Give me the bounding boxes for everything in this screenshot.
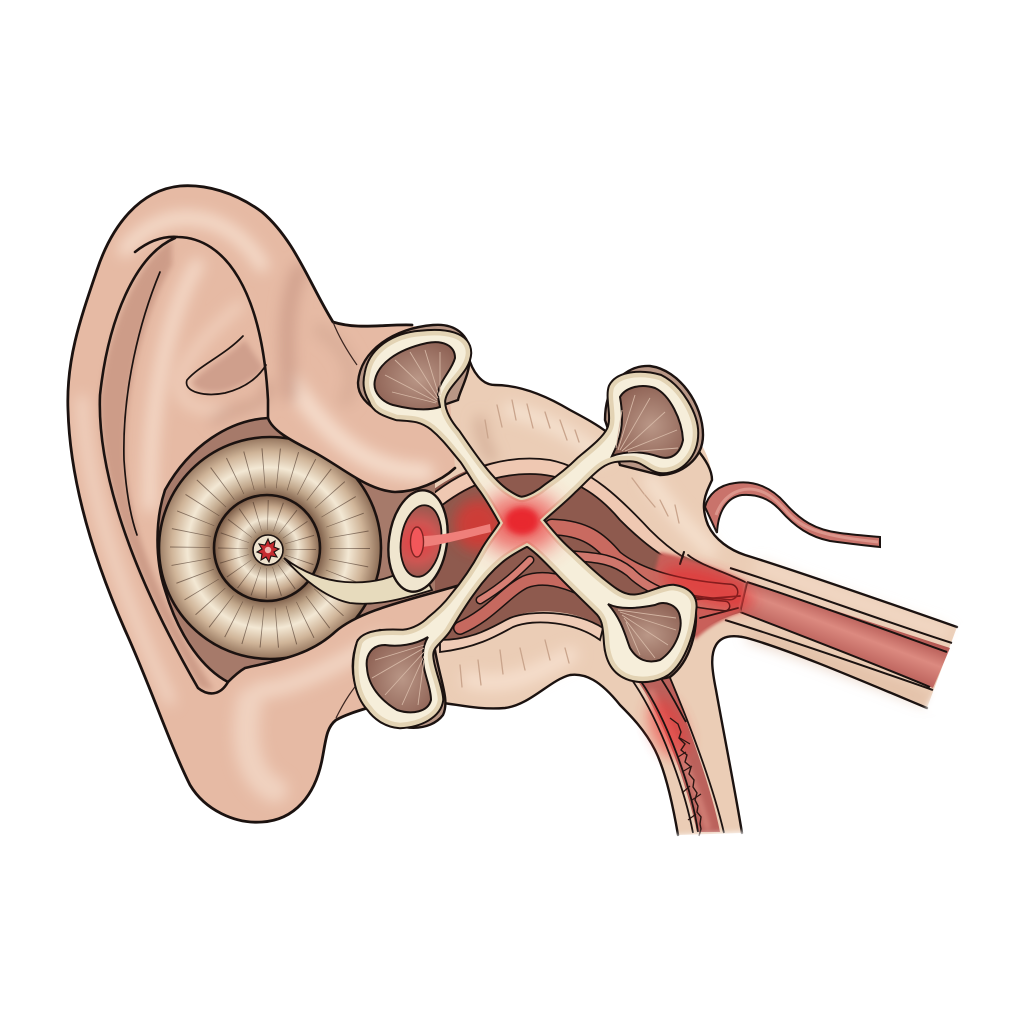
inner radial ridges (233, 515, 301, 583)
middle ear cavity (428, 459, 759, 652)
hatch pattern (670, 718, 701, 836)
bottom-right cup (608, 603, 681, 662)
cochlear tail (284, 558, 432, 604)
lower pink arch (440, 613, 603, 652)
lower red branch (632, 673, 724, 836)
X-shaped bone (356, 333, 695, 725)
tissue, tube and lower branch skin (425, 335, 957, 835)
top-right cup (612, 386, 683, 458)
scapha channel (100, 240, 214, 690)
outer radial ridges (190, 468, 350, 628)
antihelix line (124, 272, 160, 535)
tissue creases (460, 400, 679, 687)
outer ear body (68, 186, 460, 822)
fade at tube ends (670, 620, 975, 850)
upper pink arch (428, 459, 683, 564)
vessels (460, 527, 745, 628)
oval window ring (382, 486, 491, 596)
cochlea spiral (159, 437, 432, 659)
concha and tragus edge (158, 418, 460, 682)
inner helix line (100, 237, 268, 693)
ear outline (68, 186, 412, 822)
red glow left of centre (454, 499, 502, 551)
tissue outline (443, 355, 957, 835)
cochlea core (253, 535, 283, 565)
shading on tissue (470, 410, 945, 700)
red junction into tube (650, 552, 747, 640)
central red glow (481, 493, 561, 553)
fossa fold (192, 340, 264, 392)
ear highlights (82, 218, 425, 790)
cup rims (353, 325, 703, 728)
stapes stalk (421, 524, 491, 547)
ear anatomy illustration (66, 184, 958, 836)
concha cavity (158, 418, 435, 682)
red auditory tube (725, 568, 952, 690)
nerve branch at upper right (705, 482, 880, 547)
bottom-left cup (367, 637, 431, 712)
top-left cup (374, 342, 455, 409)
